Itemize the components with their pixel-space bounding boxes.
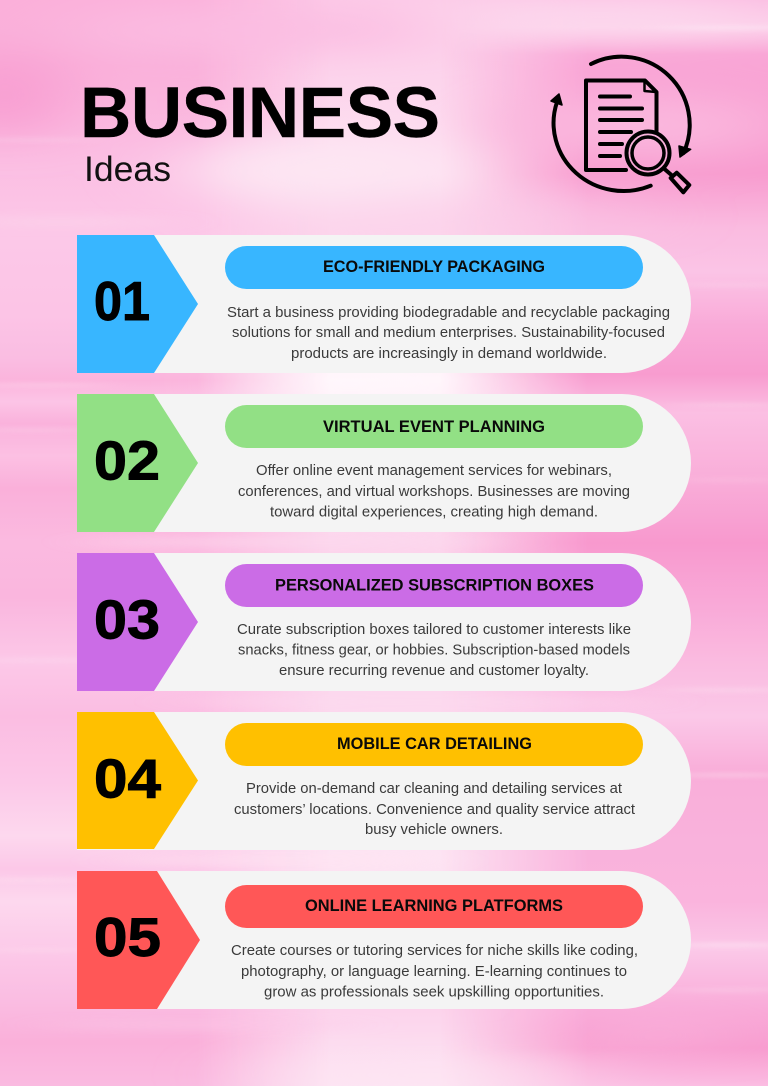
- arrow tab 01: 01: [94, 271, 150, 332]
- panel: 03 personalized subscription boxes: [77, 553, 691, 691]
- body text 03: [237, 622, 631, 679]
- arrow tab 05: [77, 871, 200, 1009]
- icon: document with magnifier and cycle arrows: [551, 57, 691, 192]
- body text 01: [227, 305, 670, 362]
- body text 05: Create courses or tutoring services for niche skills like coding,: [231, 943, 638, 959]
- body text 02: conferences, and virtual workshops. Businesses are moving: [238, 484, 630, 500]
- body text 02: [238, 463, 630, 520]
- body text 03: ensure recurring revenue and customer loyalty.: [279, 663, 589, 679]
- heading pill 01: ECO-FRIENDLY PACKAGING: [323, 258, 545, 276]
- heading pill 04: [225, 723, 643, 766]
- subtitle: Ideas: [84, 150, 171, 189]
- arrow tab 01: [77, 235, 198, 373]
- body text 04: Provide on-demand car cleaning and detailing services at: [246, 781, 622, 797]
- body text 02: Offer online event management services for webinars,: [256, 463, 612, 479]
- heading pill 02: VIRTUAL EVENT PLANNING: [323, 418, 545, 436]
- heading pill 03: PERSONALIZED SUBSCRIPTION BOXES: [275, 576, 594, 594]
- arrow tab 02: [77, 394, 198, 532]
- arrow tab 05: 05: [94, 907, 161, 968]
- body text 03: Curate subscription boxes tailored to customer interests like: [237, 622, 631, 638]
- body text 05: [231, 943, 638, 1000]
- arrow tab 03: [77, 553, 198, 691]
- heading pill 01: [225, 246, 643, 289]
- title: [80, 74, 440, 189]
- body text 04: [234, 781, 635, 838]
- body text 04: busy vehicle owners.: [365, 822, 503, 838]
- body text 03: snacks, fitness gear, or hobbies. Subscription-based models: [238, 642, 630, 658]
- panel: 04 mobile car detailing: [77, 712, 691, 850]
- body text 02: toward digital experiences, creating high demand.: [270, 504, 598, 520]
- body text 05: photography, or language learning. E-learning continues to: [241, 964, 627, 980]
- body text 05: grow as professionals seek upskilling opportunities.: [264, 984, 604, 1000]
- arrow tab 04: [77, 712, 198, 849]
- body text 01: products are increasingly in demand worldwide.: [291, 346, 607, 362]
- panel: 05 online learning platforms: [77, 871, 691, 1009]
- arrow tab 04: 04: [94, 748, 162, 810]
- title: BUSINESS: [80, 74, 440, 153]
- heading pill 02: [225, 405, 643, 448]
- arrow tab 02: 02: [94, 430, 160, 492]
- body text 01: solutions for small and medium enterprises. Sustainability-focused: [232, 325, 665, 341]
- arrow tab 03: 03: [94, 590, 160, 650]
- panel: 01 eco-friendly packaging: [77, 235, 691, 373]
- body text 04: customers’ locations. Convenience and quality service attract: [234, 802, 635, 818]
- panel: 02 virtual event planning: [77, 394, 691, 532]
- heading pill 03: [225, 564, 643, 607]
- heading pill 05: ONLINE LEARNING PLATFORMS: [305, 897, 563, 915]
- body text 01: Start a business providing biodegradable and recyclable packaging: [227, 305, 670, 321]
- heading pill 05: [225, 885, 643, 928]
- heading pill 04: MOBILE CAR DETAILING: [337, 735, 532, 753]
